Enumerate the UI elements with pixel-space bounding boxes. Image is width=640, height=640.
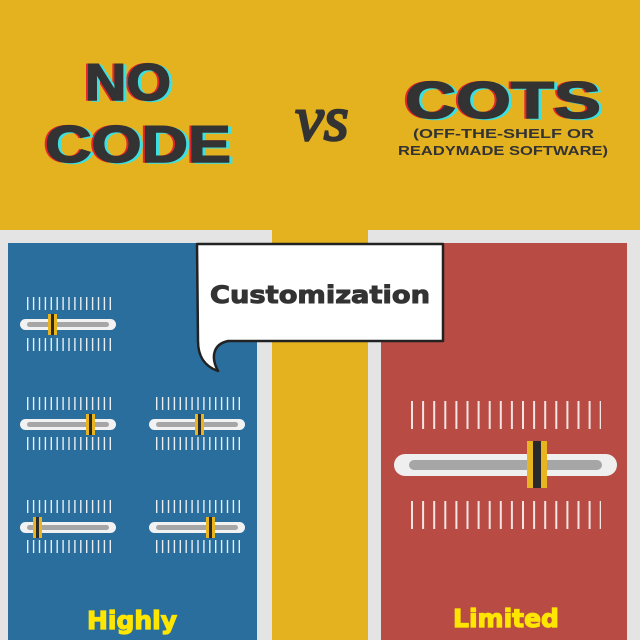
title: NO CODE: NO [88,55,174,113]
subtitle [398,126,608,158]
title: COTS: COTS [408,73,604,131]
slider row 1 [20,304,116,344]
slider row 2 left [20,404,116,444]
title: COTS: COTS [403,72,599,130]
vs script: vs [295,83,349,154]
subtitle: (OFF-THE-SHELF OR [413,126,595,141]
panel: COTS [368,230,640,640]
title: NO CODE: CODE [45,116,231,174]
label: Highly: Highly [87,606,177,635]
slider row 3 right [149,506,245,546]
title: COTS: COTS [405,72,601,130]
title: NO CODE: NO [85,54,171,112]
title: NO CODE: CODE [43,116,229,174]
slider row 3 left [20,506,116,546]
title: NO CODE [43,54,234,175]
title: NO CODE: NO [83,54,169,112]
slider row 2 right [149,404,245,444]
title: NO CODE: CODE [48,117,234,175]
label: Limited: Limited [453,604,559,633]
callout: Customization speech bubble [197,244,443,371]
panel: No Code [0,230,272,640]
callout: Customization speech bubble: Customization [210,281,430,309]
big slider [394,415,617,515]
subtitle: READYMADE SOFTWARE) [398,143,608,158]
